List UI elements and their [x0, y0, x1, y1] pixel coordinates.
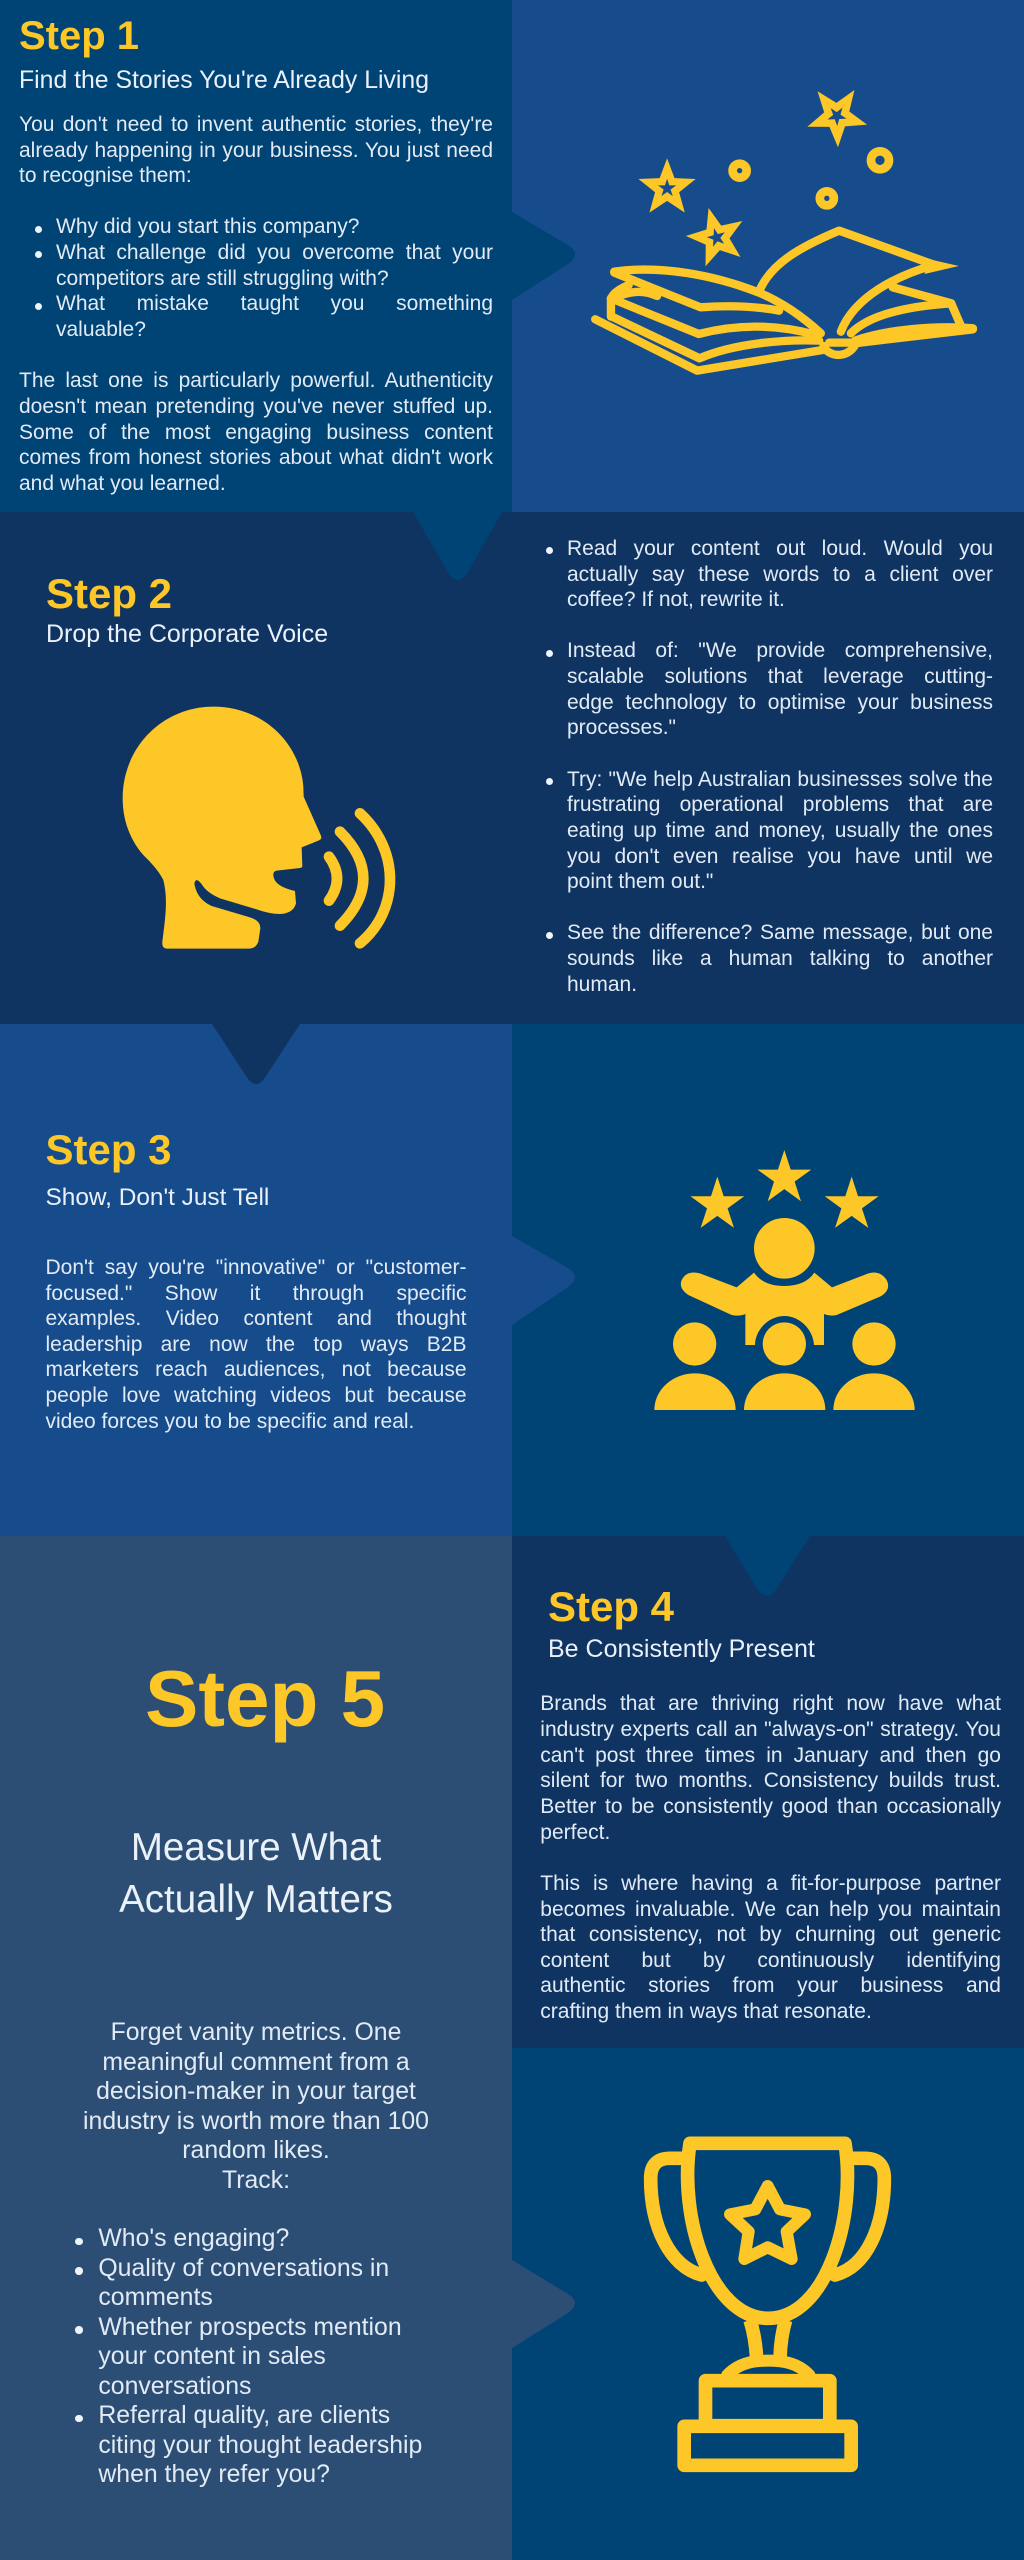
panel: step 3 text background [0, 1024, 512, 1536]
subtitle: step 5 [119, 1826, 393, 1921]
text block: step 1 body: You don't need to invent authentic stories, they're [19, 113, 493, 136]
text block: step 5 intro: random likes. [182, 2137, 330, 2164]
icon: speaking head [123, 707, 390, 949]
text block: step 2 bullet list: eating up time and money, usually the ones [567, 819, 993, 842]
text block: step 4 body: that consistency, not by churning out generic [540, 1923, 1001, 1946]
text block: step 2 bullet list: scalable solutions that leverage cutting- [567, 665, 993, 688]
text block: step 3 body: Don't say you're "innovative" or "customer- [46, 1256, 466, 1279]
text block: step 2 bullet list: frustrating operational problems that are [567, 793, 993, 816]
text block: step 2 bullet list: Try: "We help Australian businesses solve the [567, 768, 993, 791]
subtitle: step 5: Actually Matters [119, 1878, 393, 1921]
heading: step 4: Step 4 [548, 1582, 674, 1630]
text block: step 4 body: This is where having a fit-for-purpose partner [540, 1872, 1001, 1895]
text block: step 2 bullet list: See the difference? Same message, but one [567, 921, 993, 944]
text block: step 1 body: What mistake taught you something [56, 292, 493, 315]
text block: step 2 bullet list: processes." [567, 716, 676, 739]
subtitle: step 3: Show, Don't Just Tell [46, 1184, 269, 1210]
panel: step 4 background [512, 1536, 1024, 2048]
icon part: sound waves [329, 813, 390, 943]
text block: step 3 body: people love watching videos but because [46, 1384, 466, 1407]
text block: step 1 body: comes from honest stories about what didn't work [19, 446, 493, 469]
text block: step 4 body [540, 1692, 1001, 2023]
icon: open book with stars [595, 90, 973, 371]
text block: step 5 intro: meaningful comment from a [102, 2049, 410, 2076]
panel: step 1 icon background [512, 0, 1024, 512]
text block: step 5 intro: decision-maker in your target [96, 2078, 416, 2105]
heading: step 3: Step 3 [46, 1126, 172, 1173]
text block: step 1 body: valuable? [56, 318, 146, 341]
subtitle: step 4: Be Consistently Present [548, 1635, 815, 1663]
text block: step 5 bullet list: citing your thought leadership [98, 2432, 422, 2459]
text block: step 5 intro: Track: [222, 2167, 290, 2194]
panel: step 3 icon background [512, 1024, 1024, 1536]
icon part: page tip [924, 259, 959, 274]
arrow: step 1 right pointer [512, 212, 575, 300]
arrow: step 1 down pointer [413, 512, 502, 580]
text block: step 1 body: competitors are still struggling with? [56, 267, 389, 290]
text block: step 4 body: Better to be consistently good than occasionally [540, 1795, 1001, 1818]
panel: step 5 background [0, 1536, 512, 2560]
text block: step 1 body: The last one is particularly powerful. Authenticity [19, 369, 493, 392]
text block: step 1 body: doesn't mean pretending you've never stuffed up. [19, 395, 493, 418]
icon: presenter with audience and stars [654, 1150, 915, 1410]
text block: step 2 bullet list: sounds like a human talking to another [567, 947, 993, 970]
text block: step 4 body: crafting them in ways that resonate. [540, 2000, 872, 2023]
text block: step 4 body: authentic stories from your business and [540, 1974, 1001, 1997]
panel: trophy icon background [512, 2048, 1024, 2560]
panel: step 2 background [0, 512, 1024, 1024]
text block: step 5 bullet list: Whether prospects mention [98, 2314, 402, 2341]
text block: step 5 bullet list: your content in sales [98, 2343, 326, 2370]
text block: step 1 body: and what you learned. [19, 472, 226, 495]
heading: step 5: Step 5 [145, 1654, 385, 1743]
text block: step 2 bullet list: coffee? If not, rewrite it. [567, 588, 785, 611]
text block: step 2 bullet list: you don't even realise you have until we [567, 845, 993, 868]
icon: trophy [651, 2143, 884, 2465]
text block: step 5 intro [83, 2019, 429, 2194]
heading: step 2: Step 2 [46, 570, 172, 616]
text block: step 3 body: focused." Show it through specific [46, 1282, 466, 1305]
text block: step 2 bullet list: edge technology to optimise your business [567, 691, 993, 714]
text block: step 4 body: content but by continuously identifying [540, 1949, 1001, 1972]
text block: step 2 bullet list [546, 537, 993, 996]
subtitle: step 5: Measure What [131, 1826, 381, 1869]
arrow: step 3 to step 4 down pointer [725, 1536, 810, 1596]
text block: step 2 bullet list: point them out." [567, 870, 713, 893]
text block: step 5 intro: Forget vanity metrics. One [111, 2019, 401, 2046]
text block: step 1 body: Some of the most engaging business content [19, 421, 493, 444]
text block: step 1 body: to recognise them: [19, 164, 192, 187]
text block: step 4 body: perfect. [540, 1821, 610, 1844]
text block: step 2 bullet list: Read your content out loud. Would you [567, 537, 993, 560]
text block: step 3 body: marketers reach audiences, not because [46, 1358, 466, 1381]
text block: step 1 body [19, 113, 493, 495]
text block: step 2 bullet list: human. [567, 973, 637, 996]
text block: step 3 body: video forces you to be specific and real. [46, 1410, 414, 1433]
arrow: step 2 down pointer [212, 1024, 300, 1084]
arrow: step 5 right pointer [512, 2260, 575, 2348]
text block: step 5 bullet list: Referral quality, are clients [98, 2402, 390, 2429]
text block: step 4 body: becomes invaluable. We can help you maintain [540, 1898, 1001, 1920]
text block: step 4 body: Brands that are thriving right now have what [540, 1692, 1001, 1715]
text block: step 5 bullet list: comments [98, 2284, 213, 2311]
text block: step 5 bullet list: conversations [98, 2373, 251, 2400]
text block: step 5 intro: industry is worth more than 100 [83, 2108, 429, 2135]
text block: step 4 body: silent for two months. Consistency builds trust. [540, 1769, 1001, 1792]
text block: step 3 body: examples. Video content and thought [46, 1307, 466, 1330]
text block: step 2 bullet list: Instead of: "We provide comprehensive, [567, 639, 993, 662]
text block: step 1 body: already happening in your business. You just need [19, 139, 493, 162]
text block: step 3 body: leadership are now the top ways B2B [46, 1333, 466, 1356]
icon part: stars [638, 90, 868, 269]
text block: step 4 body: can't post three times in January and then go [540, 1744, 1001, 1767]
text block: step 1 body: What challenge did you overcome that your [56, 241, 493, 264]
text block: step 2 bullet list: actually say these words to a client over [567, 563, 993, 586]
text block: step 5 bullet list: when they refer you? [98, 2461, 330, 2488]
text block: step 3 body [46, 1256, 466, 1433]
subtitle: step 2: Drop the Corporate Voice [46, 620, 328, 648]
text block: step 5 bullet list: Who's engaging? [98, 2225, 289, 2252]
icon part: rings [733, 151, 889, 205]
text block: step 1 body: Why did you start this company? [56, 215, 359, 238]
text block: step 5 bullet list [75, 2225, 422, 2488]
panel: step 1 text background [0, 0, 512, 512]
text block: step 5 bullet list: Quality of conversations in [98, 2255, 389, 2282]
text block: step 4 body: industry experts call an "always-on" strategy. You [540, 1718, 1001, 1741]
subtitle: step 1: Find the Stories You're Already Living [19, 67, 429, 94]
arrow: step 3 right pointer [512, 1236, 575, 1325]
heading: step 1: Step 1 [19, 14, 139, 58]
